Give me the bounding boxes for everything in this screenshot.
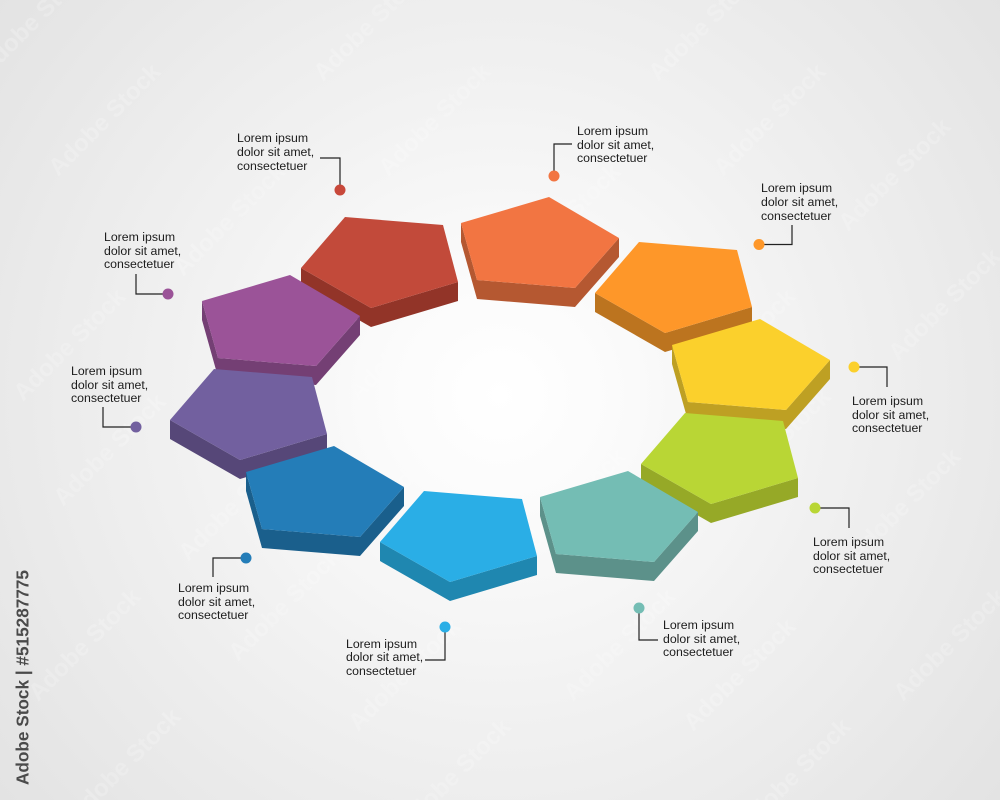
callout: dark blue: dolor sit amet, — [178, 595, 255, 609]
pentagon: indigo — [170, 369, 327, 479]
callout: yellow: consectetuer — [852, 421, 922, 435]
callout: light blue: Lorem ipsum — [346, 637, 417, 651]
callout: teal: dolor sit amet, — [663, 632, 740, 646]
pentagon: light blue — [380, 491, 537, 601]
callout: yellow: dolor sit amet, — [852, 408, 929, 422]
callout: purple: consectetuer — [104, 257, 174, 271]
watermark pattern: Adobe Stock — [503, 158, 627, 281]
callout: red: consectetuer — [237, 159, 307, 173]
callout: light blue: consectetuer — [346, 664, 416, 678]
watermark pattern: Adobe Stock — [168, 158, 292, 281]
callout: lime green — [810, 502, 890, 576]
watermark pattern: Adobe Stock — [558, 583, 682, 706]
callout: purple: Lorem ipsum — [104, 230, 175, 244]
callout: lime green: consectetuer — [813, 562, 883, 576]
callout: dark blue — [178, 552, 255, 622]
callout: coral orange — [548, 124, 654, 182]
callout: orange: dolor sit amet, — [761, 195, 838, 209]
watermark pattern: Adobe Stock — [708, 58, 832, 181]
callout: orange: consectetuer — [761, 209, 831, 223]
pentagon: purple — [202, 275, 360, 385]
callout: indigo — [71, 364, 148, 432]
watermark pattern: Adobe Stock — [678, 613, 802, 736]
watermark pattern: Adobe Stock — [23, 583, 147, 706]
pentagon: lime green — [641, 413, 798, 523]
pentagon: orange — [595, 242, 752, 352]
watermark pattern: Adobe Stock — [678, 283, 802, 406]
watermark pattern: Adobe Stock — [343, 283, 467, 406]
watermark pattern: Adobe Stock — [223, 543, 347, 666]
callout: orange — [754, 181, 838, 250]
callout: red: Lorem ipsum — [237, 131, 308, 145]
watermark pattern: Adobe Stock — [713, 383, 837, 506]
watermark pattern: Adobe Stock — [373, 58, 497, 181]
callout: purple — [104, 230, 181, 300]
callout: dark blue: consectetuer — [178, 608, 248, 622]
callout: yellow: Lorem ipsum — [852, 394, 923, 408]
callout: lime green: dolor sit amet, — [813, 549, 890, 563]
callout: red — [237, 131, 346, 196]
pentagon: yellow — [672, 319, 830, 429]
callout: light blue — [346, 622, 450, 678]
callout: orange: Lorem ipsum — [761, 181, 832, 195]
callout: red: dolor sit amet, — [237, 145, 314, 159]
watermark pattern: Adobe Stock — [43, 58, 167, 181]
callout: lime green: Lorem ipsum — [813, 535, 884, 549]
callout: indigo: consectetuer — [71, 391, 141, 405]
pentagon: teal — [540, 471, 698, 581]
pentagon: coral orange — [461, 197, 619, 307]
callout: purple: dolor sit amet, — [104, 244, 181, 258]
pentagon: red — [301, 217, 458, 327]
callout: coral orange: consectetuer — [577, 151, 647, 165]
watermark pattern: Adobe Stock — [173, 443, 297, 566]
stock id vertical text: Adobe Stock | #515287775 — [12, 570, 32, 785]
watermark pattern: Adobe Stock — [508, 443, 632, 566]
callout: teal — [634, 602, 740, 659]
callout: indigo: dolor sit amet, — [71, 378, 148, 392]
callout: yellow — [848, 362, 929, 435]
watermark pattern: Adobe Stock — [343, 613, 467, 736]
watermark pattern: Adobe Stock — [843, 443, 967, 566]
callout: teal: consectetuer — [663, 645, 733, 659]
callout: dark blue: Lorem ipsum — [178, 581, 249, 595]
callout: coral orange: Lorem ipsum — [577, 124, 648, 138]
watermark pattern: Adobe Stock — [217, 253, 341, 376]
watermark pattern: Adobe Stock — [833, 113, 957, 236]
callout: indigo: Lorem ipsum — [71, 364, 142, 378]
callout: light blue: dolor sit amet, — [346, 650, 423, 664]
pentagon: dark blue — [246, 446, 404, 556]
watermark pattern: Adobe Stock — [550, 238, 674, 361]
callout: teal: Lorem ipsum — [663, 618, 734, 632]
watermark pattern: Adobe Stock — [8, 283, 132, 406]
callout: coral orange: dolor sit amet, — [577, 138, 654, 152]
watermark pattern: Adobe Stock — [48, 388, 172, 511]
watermark pattern: Adobe Stock — [378, 383, 502, 506]
